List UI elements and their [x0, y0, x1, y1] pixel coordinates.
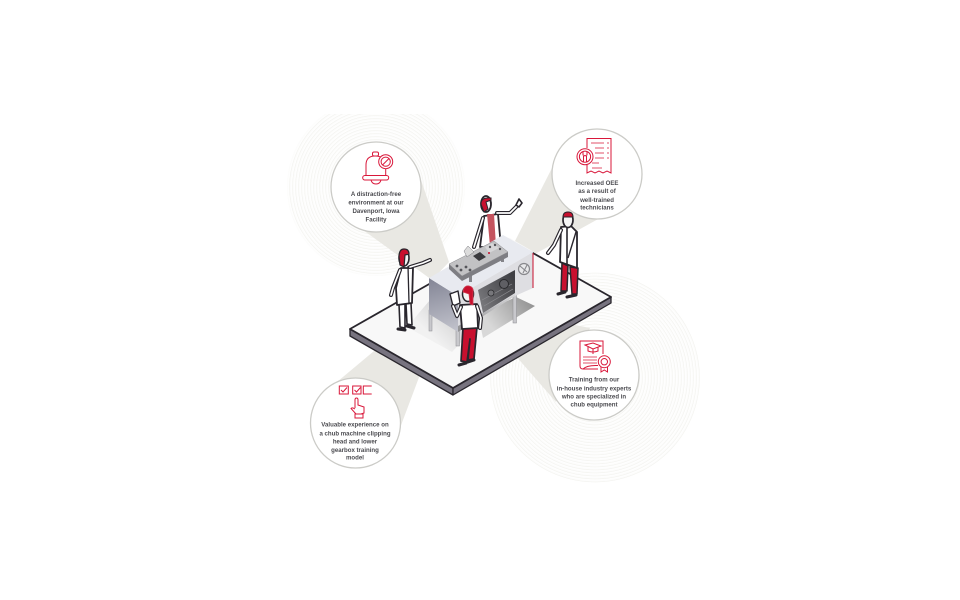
callout text: chub equipment: [570, 402, 618, 409]
callout text: head and lower: [333, 439, 378, 446]
platform: [350, 238, 611, 395]
callout text: [557, 376, 632, 409]
icon: checkboxes and pointing hand: [339, 386, 372, 418]
icon: muted bell: [363, 152, 393, 184]
concentric ring pattern: bottom right: [490, 272, 700, 482]
callout text: Valuable experience on: [321, 421, 389, 428]
machine end face: [429, 278, 458, 332]
person: left pointing woman: [391, 249, 430, 330]
light beam: OEE callout: [513, 166, 600, 254]
person: front woman with tablet: [450, 286, 481, 365]
callout text: A distraction-free: [351, 191, 402, 198]
callout text: Increased OEE: [575, 180, 619, 187]
tablet: [450, 291, 460, 306]
callout text: gearbox training: [331, 447, 379, 454]
callout text: Davenport, Iowa: [352, 208, 400, 215]
gearbox training plate: [449, 241, 508, 282]
person: top man behind machine: [474, 196, 522, 247]
light beam: in-house training callout: [515, 322, 590, 402]
callout text: technicians: [580, 204, 614, 212]
machine legs: [429, 292, 516, 346]
icon: document with wrench: [577, 138, 611, 173]
machine long face: [458, 252, 533, 332]
light beam: training model callout: [325, 346, 421, 428]
machine window: [478, 270, 515, 313]
machine emblem: [518, 264, 530, 274]
callout text: Training from our: [569, 376, 620, 383]
callout text: [348, 191, 404, 224]
callout text: well-trained: [579, 197, 614, 204]
callout: distraction-free environment: [331, 142, 421, 232]
concentric ring pattern: top left: [289, 114, 463, 274]
callout text: in-house industry experts: [557, 385, 632, 392]
callout: increased OEE: [552, 129, 642, 219]
machine top face: [429, 235, 533, 296]
callout text: Facility: [366, 216, 387, 224]
light beam: distraction-free callout: [363, 180, 449, 280]
callout text: as a result of: [578, 188, 617, 195]
callout text: environment at our: [348, 200, 404, 206]
icon: certificate with graduation cap: [580, 341, 610, 372]
machine shadow on platform: [407, 297, 535, 352]
callout text: model: [346, 454, 364, 461]
callout text: a chub machine clipping: [319, 431, 391, 438]
callout: in-house training: [549, 330, 639, 420]
callout: valuable experience: [310, 378, 400, 468]
callout text: [319, 421, 391, 461]
callout text: who are specialized in: [561, 393, 626, 400]
person: right man: [548, 212, 578, 297]
callout text: [575, 180, 619, 212]
machine: [429, 235, 533, 346]
